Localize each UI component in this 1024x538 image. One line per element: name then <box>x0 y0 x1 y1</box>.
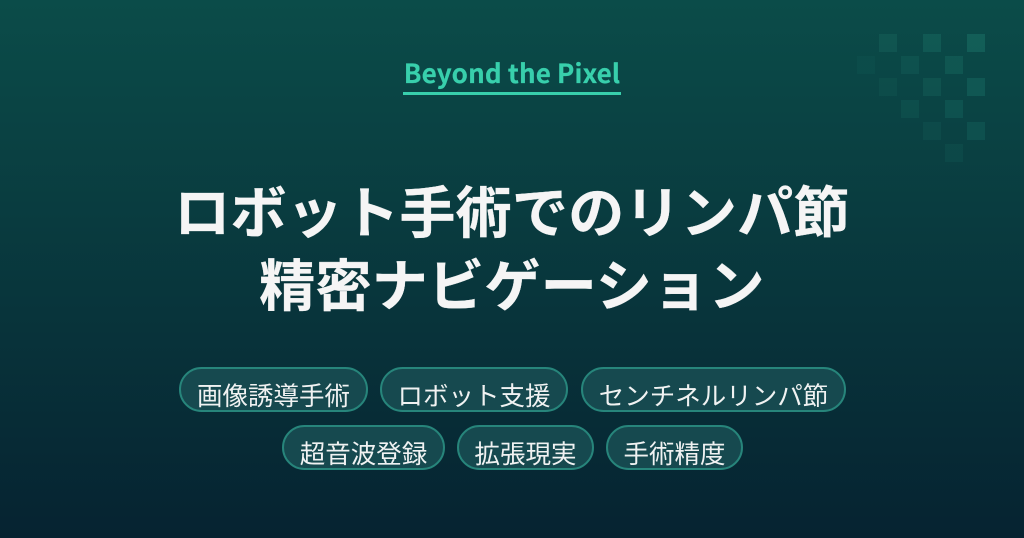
tag: 超音波登録: 超音波登録 <box>300 434 427 471</box>
tag: 拡張現実 <box>457 425 594 470</box>
decorative pixel grid icon <box>879 34 985 140</box>
tag: 手術精度 <box>606 425 743 470</box>
tag: 超音波登録 <box>282 425 445 470</box>
tag: ロボット支援: ロボット支援 <box>397 376 550 413</box>
title line 1: ロボット手術でのリンパ節 <box>174 169 850 250</box>
tag: 画像誘導手術: 画像誘導手術 <box>197 376 350 413</box>
title <box>174 169 850 323</box>
tag: 画像誘導手術 <box>179 367 368 412</box>
keyword tags <box>179 367 846 471</box>
tag: 拡張現実: 拡張現実 <box>474 434 576 471</box>
title line 2: 精密ナビゲーション <box>259 242 765 323</box>
tag: 手術精度: 手術精度 <box>623 434 726 471</box>
brand label: Beyond the Pixel: Beyond the Pixel <box>404 54 620 91</box>
tag: センチネルリンパ節: センチネルリンパ節 <box>599 376 828 413</box>
tag: センチネルリンパ節 <box>581 367 846 412</box>
tag: ロボット支援 <box>380 367 568 412</box>
